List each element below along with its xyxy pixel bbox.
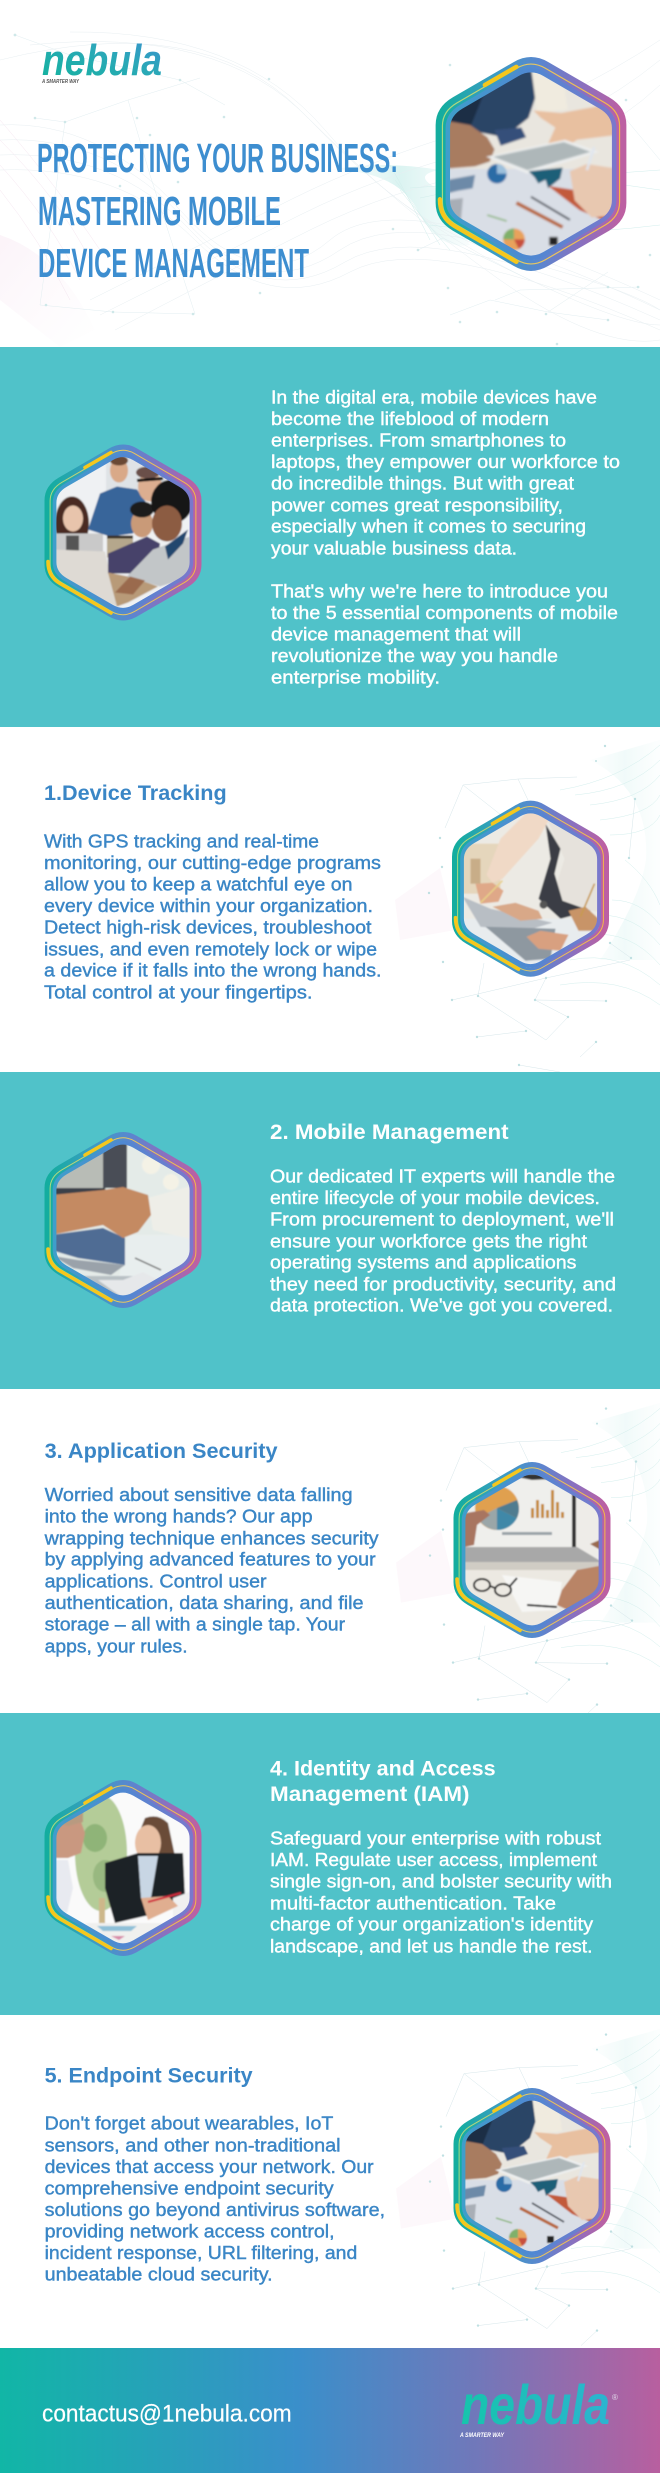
body text: With GPS tracking and real-time (44, 830, 319, 851)
body text: multi-factor authentication. Take (270, 1892, 556, 1913)
contact email: contactus@1nebula.com (42, 2401, 292, 2428)
body text: into the wrong hands? Our app (45, 1506, 313, 1527)
body text: Detect high-risk devices, troubleshoot (44, 917, 371, 938)
body text: IAM. Regulate user access, implement (270, 1849, 597, 1870)
body text: sensors, and other non-traditional (45, 2134, 341, 2155)
body text: single sign-on, and bolster security with (270, 1871, 612, 1892)
body text: every device within your organization. (44, 895, 373, 916)
intro text (271, 386, 620, 688)
body text: Total control at your fingertips. (44, 981, 312, 1002)
heading: 3. Application Security (45, 1439, 278, 1463)
heading: Management (IAM) (270, 1782, 470, 1806)
body text: Our dedicated IT experts will handle the (270, 1165, 615, 1186)
body text: wrapping technique enhances security (44, 1527, 379, 1548)
icon: hexagon photo, smiling businesswoman (48, 1784, 197, 1952)
decorative waves and network background (0, 32, 660, 347)
intro text: revolutionize the way you handle (271, 645, 558, 666)
body text: providing network access control, (45, 2221, 335, 2242)
body text: Worried about sensitive data falling (45, 1484, 353, 1505)
logo: nebula: A SMARTER WAY (459, 2432, 505, 2439)
body text (270, 1827, 612, 1956)
title: MASTERING MOBILE (38, 188, 281, 234)
body text: by applying advanced features to your (45, 1549, 376, 1570)
panel: 5. Endpoint Security (45, 2064, 606, 2285)
body text: they need for productivity, security, and (270, 1273, 616, 1294)
icon: hexagon photo, handshake (48, 1136, 197, 1304)
intro text: power comes great responsibility, (271, 494, 563, 515)
body text: a device if it falls into the wrong hands. (44, 960, 382, 981)
intro text: That's why we're here to introduce you (271, 580, 608, 601)
body text (44, 830, 382, 1002)
heading: 2. Mobile Management (270, 1120, 509, 1144)
intro text: your valuable business data. (271, 537, 517, 558)
panel: 3. Application Security (44, 1439, 606, 1656)
panel: 1. Device Tracking (44, 781, 604, 1002)
body text: allow you to keep a watchful eye on (44, 874, 352, 895)
intro text: In the digital era, mobile devices have (271, 386, 597, 407)
body text: From procurement to deployment, we'll (270, 1209, 614, 1230)
body text: entire lifecycle of your mobile devices. (270, 1187, 600, 1208)
intro text: to the 5 essential components of mobile (271, 602, 618, 623)
icon: hexagon photo, hands on laptops (456, 805, 604, 972)
panel: section 5 decoration (396, 2029, 660, 2361)
body text: applications. Control user (45, 1570, 267, 1591)
body text (270, 1165, 616, 1316)
panel: header (0, 32, 660, 347)
icon: hexagon photo, team reviewing tablet and reports (440, 63, 621, 266)
intro text: become the lifeblood of modern (271, 408, 549, 429)
intro text: enterprises. From smartphones to (271, 430, 566, 451)
body text: authentication, data sharing, and file (45, 1592, 364, 1613)
heading (270, 1757, 496, 1806)
panel: footer (0, 2348, 660, 2473)
body text: incident response, URL filtering, and (45, 2242, 357, 2263)
heading: 1.Device Tracking (44, 781, 227, 805)
panel: section 3 decoration (396, 1403, 660, 1735)
panel: section 1 decoration (395, 740, 660, 1072)
body text: solutions go beyond antivirus software, (45, 2199, 385, 2220)
logo: nebula: nebula (42, 36, 162, 85)
body text: charge of your organization's identity (270, 1914, 594, 1935)
panel: introduction (0, 347, 660, 727)
body text (44, 1484, 379, 1656)
body text: storage – all with a single tap. Your (45, 1613, 345, 1634)
icon: hexagon photo, laptop with charts (457, 1466, 606, 1634)
title: PROTECTING YOUR BUSINESS: (37, 135, 398, 181)
icon: hexagon photo, team reviewing tablet and reports (457, 2092, 606, 2260)
title: DEVICE MANAGEMENT (38, 240, 309, 286)
intro text: especially when it comes to securing (271, 516, 586, 537)
body text: devices that access your network. Our (45, 2156, 374, 2177)
body text (45, 2113, 385, 2285)
intro text: device management that will (271, 624, 521, 645)
panel: 2. Mobile Management (0, 1072, 660, 1389)
body text: ensure your workforce gets the right (270, 1230, 587, 1251)
body text: monitoring, our cutting-edge programs (44, 852, 381, 873)
body text: unbeatable cloud security. (45, 2264, 273, 2285)
body text: Safeguard your enterprise with robust (270, 1827, 601, 1848)
body text: landscape, and let us handle the rest. (270, 1935, 592, 1956)
body text: operating systems and applications (270, 1252, 576, 1273)
intro text: do incredible things. But with great (271, 473, 574, 494)
panel: 4. Identity and Access Management (0, 1713, 660, 2015)
title (37, 135, 398, 286)
body text: Don't forget about wearables, IoT (45, 2113, 333, 2134)
logo: nebula: nebula (461, 2373, 610, 2436)
body text: issues, and even remotely lock or wipe (44, 938, 377, 959)
body text: apps, your rules. (45, 1635, 188, 1656)
body text: comprehensive endpoint security (45, 2177, 334, 2198)
intro text: enterprise mobility. (271, 667, 440, 688)
logo: nebula: A SMARTER WAY (41, 79, 80, 85)
heading: 4. Identity and Access (270, 1757, 496, 1781)
heading: 5. Endpoint Security (45, 2064, 253, 2088)
intro text: laptops, they empower our workforce to (271, 451, 620, 472)
logo: nebula: ® (612, 2393, 618, 2402)
body text: data protection. We've got you covered. (270, 1295, 613, 1316)
icon: hexagon photo, team around laptop (48, 449, 197, 616)
